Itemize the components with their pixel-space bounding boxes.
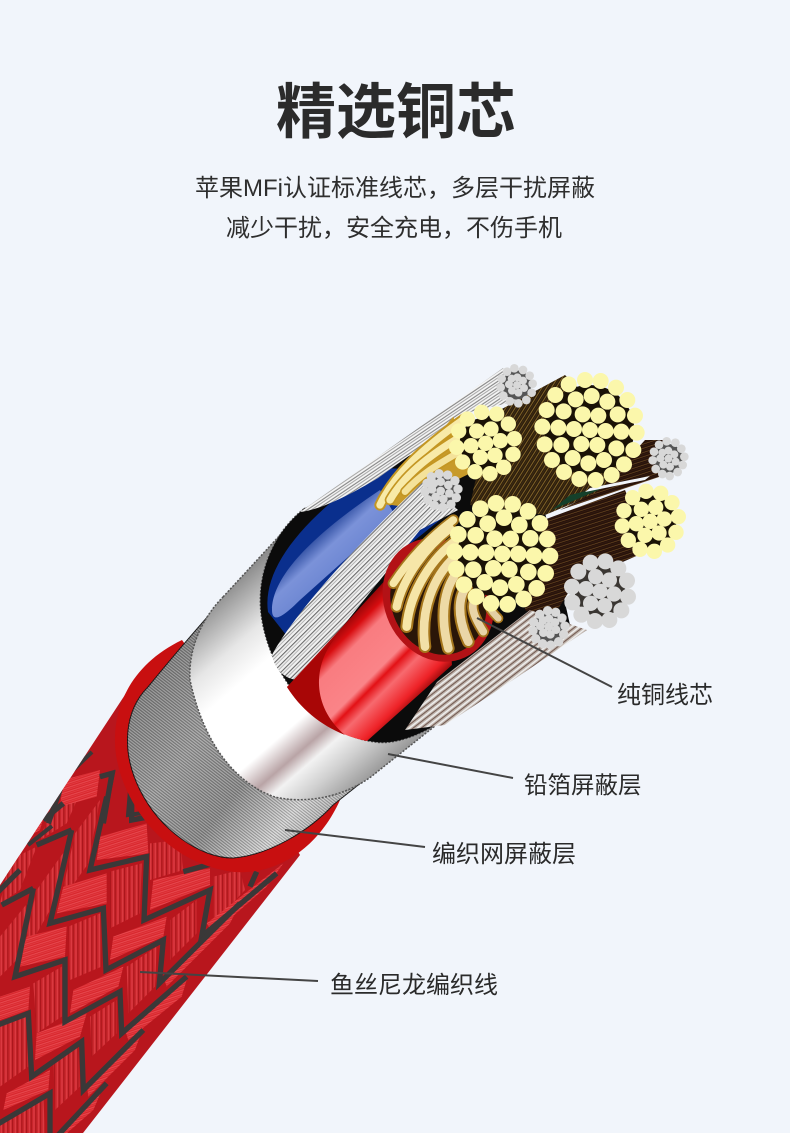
blue insulated core — [267, 468, 450, 640]
callout: braided shield — [285, 830, 576, 868]
bundle: small yellow top-left — [449, 405, 522, 481]
aluminium foil shield — [190, 508, 440, 800]
callout: nylon braid: 鱼丝尼龙编织线 — [330, 972, 498, 999]
callout: aluminium foil shield: 铅箔屏蔽层 — [524, 772, 642, 798]
bundle: gray large lower — [564, 553, 636, 629]
bundle: gray small right — [648, 437, 689, 480]
red end ring — [115, 640, 340, 872]
silver tinned strands, upper — [300, 368, 530, 512]
bundle: large yellow lower — [446, 495, 558, 613]
cable illustration — [0, 364, 689, 1133]
callout: pure copper core — [477, 618, 713, 709]
subtitle text block: 减少干扰，安全充电，不伤手机 — [226, 215, 562, 242]
bundle: large yellow top — [534, 372, 645, 488]
dark copper strands bundles — [470, 375, 680, 622]
callout: nylon braid — [140, 972, 498, 999]
silver tinned strands, left — [272, 480, 458, 680]
title: 精选铜芯 — [276, 79, 516, 146]
nylon braided outer sleeve — [0, 694, 300, 1133]
red insulated core — [287, 575, 452, 741]
callout: braided shield: 编织网屏蔽层 — [432, 841, 576, 868]
bundle: gray small lower — [528, 606, 570, 650]
dark interior of the cable — [260, 400, 570, 743]
bundle: gray small top — [496, 364, 537, 408]
callout: pure copper core: 纯铜线芯 — [617, 682, 713, 709]
braided metal shield — [128, 597, 377, 858]
callout: aluminium foil shield — [388, 754, 642, 798]
pale gold strands of the small bundle — [380, 417, 470, 507]
bundle: gray small left — [420, 469, 463, 512]
bundle: yellow right — [615, 484, 686, 559]
subtitle text block — [195, 175, 595, 242]
silver tinned strands, lower — [405, 610, 587, 730]
strand bundle cross-sections — [420, 364, 689, 650]
red core end face with gold twisted strands — [363, 520, 514, 680]
subtitle text block: 苹果MFi认证标准线芯，多层干扰屏蔽 — [195, 175, 595, 202]
